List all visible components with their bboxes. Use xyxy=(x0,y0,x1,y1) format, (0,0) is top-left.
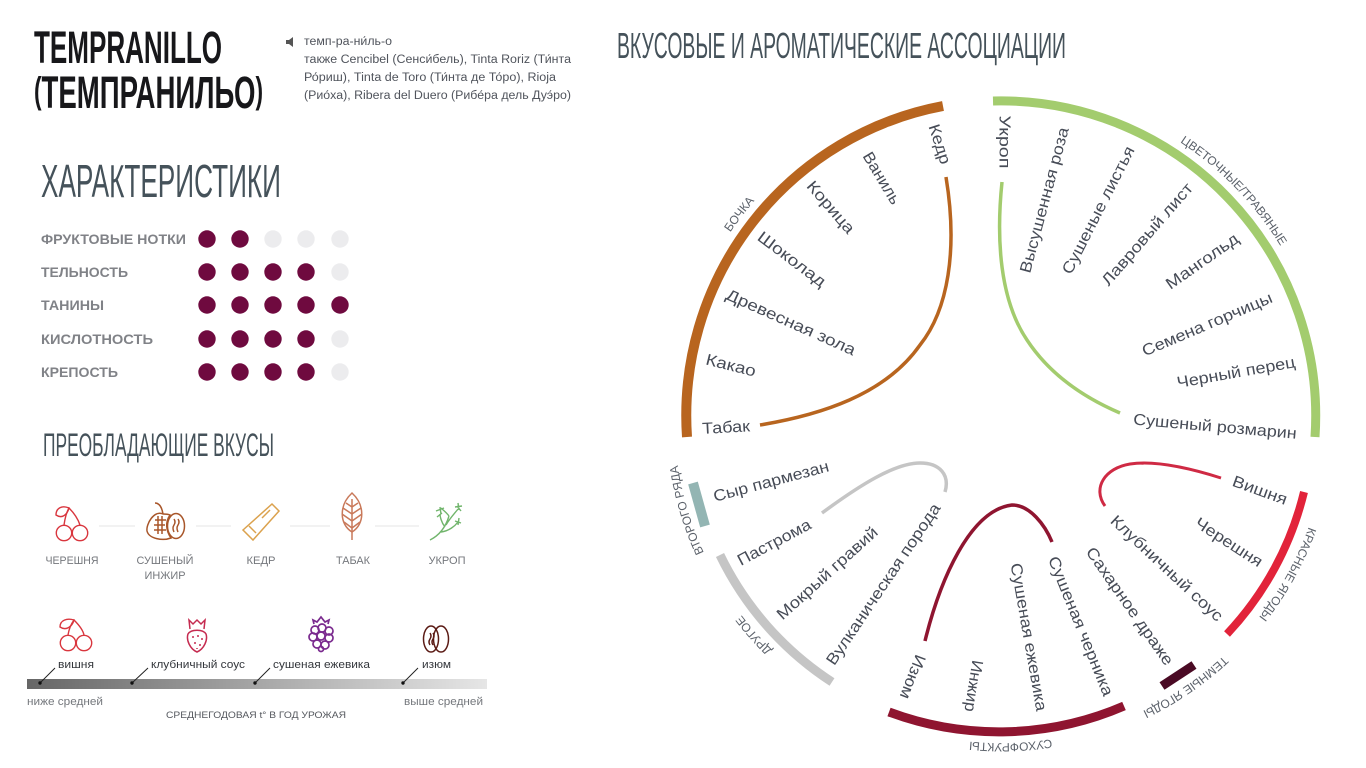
text block: pronunciation and synonyms: темп-ра-ни́ль-о xyxy=(304,36,392,48)
wheel segment: floral and herbal: Лавровый лист xyxy=(1099,180,1197,289)
title: ) xyxy=(255,70,263,111)
scale caption: СРЕДНЕГОДОВАЯ t° В ГОД УРОЖАЯ xyxy=(166,710,346,721)
wheel segment: barrel: Шоколад xyxy=(754,229,829,292)
wheel segment: barrel: Корица xyxy=(803,178,858,238)
wheel segment: red berries: Вишня xyxy=(1230,473,1289,509)
marker: dried blackberry: сушеная ежевика xyxy=(273,659,371,671)
wheel segment: other: Вулканическая порода xyxy=(823,501,944,669)
temperature gradient bar xyxy=(27,679,487,689)
row: body xyxy=(41,263,349,281)
text block: pronunciation and synonyms: также Cencibel (Сенси́бель), Tinta Roriz (Ти́нта xyxy=(304,54,572,66)
wheel segment: other: ДРУГОЕ xyxy=(736,616,774,654)
icon: blackberry xyxy=(309,617,333,652)
label: dill: УКРОП xyxy=(428,555,466,567)
panel: vintage temperature scale xyxy=(27,617,487,721)
marker: strawberry sauce xyxy=(130,659,246,685)
wheel segment: red berries xyxy=(1098,462,1316,637)
wheel segment: barrel: Кедр xyxy=(925,122,953,167)
icon: speaker xyxy=(286,37,293,47)
row: body: ТЕЛЬНОСТЬ xyxy=(41,264,128,280)
label: dried fig xyxy=(136,554,194,582)
row: fruit notes xyxy=(41,230,349,248)
title: ( xyxy=(34,70,42,111)
icon: dill xyxy=(430,503,462,540)
wheel segment: dried fruit: Сушеная черника xyxy=(1044,554,1116,699)
wheel segment: barrel: Табак xyxy=(702,418,752,438)
row: tannins: ТАНИНЫ xyxy=(41,297,104,313)
wheel segment: dark berries xyxy=(1082,544,1229,718)
wheel segment: floral and herbal xyxy=(992,96,1320,443)
wheel segment: dried fruit: СУХОФРУКТЫ xyxy=(970,740,1052,752)
label: cedar: КЕДР xyxy=(246,555,276,567)
wheel segment: floral and herbal: ЦВЕТОЧНЫЕ/ТРАВЯНЫЕ xyxy=(1180,136,1287,246)
wheel segment: secondary: ВТОРОГО РЯДА xyxy=(670,465,704,555)
wheel segment: floral and herbal: Высушенная роза xyxy=(1017,126,1073,275)
row: fruit notes: ФРУКТОВЫЕ НОТКИ xyxy=(41,231,186,247)
wheel segment: other xyxy=(716,461,948,686)
title: TEMPRANILLO xyxy=(34,22,222,73)
wheel segment: floral and herbal: Сушеные листья xyxy=(1059,144,1139,277)
title xyxy=(34,22,263,118)
wheel segment: dried fruit: Инжир xyxy=(960,659,985,713)
icon: dried fig xyxy=(147,503,184,539)
row: tannins xyxy=(41,296,349,314)
wheel segment: red berries: Клубничный соус xyxy=(1107,512,1226,625)
wheel segment: barrel: Ваниль xyxy=(859,149,903,208)
heading: dominant flavours: ПРЕОБЛАДАЮЩИЕ ВКУСЫ xyxy=(43,427,274,463)
marker: cherry xyxy=(38,659,94,685)
wheel segment: barrel: БОЧКА xyxy=(724,198,754,232)
wheel segment: floral and herbal: Мангольд xyxy=(1163,230,1243,293)
heading: characteristics: ХАРАКТЕРИСТИКИ xyxy=(41,155,281,207)
wheel segment: dried fruit: Изюм xyxy=(896,652,928,701)
icon: strawberry xyxy=(187,620,207,652)
wheel segment: red berries: КРАСНЫЕ ЯГОДЫ xyxy=(1260,528,1316,622)
label: tobacco: ТАБАК xyxy=(336,555,371,567)
wheel segment: floral and herbal: Черный перец xyxy=(1176,354,1297,392)
panel: dominant flavours row xyxy=(46,493,466,582)
wheel segment: floral and herbal: Семена горчицы xyxy=(1140,290,1275,360)
wheel segment: dried fruit: Сушеная ежевика xyxy=(1007,562,1049,713)
text block: pronunciation and synonyms: Ро́риш), Tinta de Toro (Ти́нта де То́ро), Rioja xyxy=(304,72,557,84)
label: dried fig: СУШЕНЫЙ xyxy=(136,554,194,567)
row: acidity: КИСЛОТНОСТЬ xyxy=(41,331,153,347)
wheel segment: floral and herbal: Укроп xyxy=(995,116,1012,168)
text block: pronunciation and synonyms xyxy=(304,36,572,102)
marker: dried blackberry xyxy=(253,659,371,685)
wheel segment: red berries: Черешня xyxy=(1191,515,1265,571)
marker: strawberry sauce: клубничный соус xyxy=(151,659,246,671)
label: cherry: ЧЕРЕШНЯ xyxy=(46,555,99,567)
wheel segment: floral and herbal: Сушеный розмарин xyxy=(1132,411,1297,443)
wheel segment: secondary: Сыр пармезан xyxy=(712,458,831,506)
marker: raisin: изюм xyxy=(422,659,451,671)
icon: cherry xyxy=(56,507,88,541)
icon: cherry small xyxy=(60,619,92,651)
wheel segment: other: Мокрый гравий xyxy=(774,524,882,624)
wheel segment: secondary xyxy=(670,458,831,555)
wheel segment: barrel: Древесная зола xyxy=(723,287,858,359)
wheel segment: dark berries: Сахарное драже xyxy=(1082,544,1176,669)
icon: cedar plank xyxy=(243,504,279,540)
row: alcohol xyxy=(41,363,349,381)
row: acidity xyxy=(41,330,349,348)
icon: tobacco leaf xyxy=(342,493,362,540)
text block: pronunciation and synonyms: (Рио́ха), Ribera del Duero (Рибе́ра дель Дуэ́ро) xyxy=(304,90,571,102)
icon: raisin xyxy=(424,626,448,652)
wheel segment: barrel: Какао xyxy=(704,352,758,381)
row: alcohol: КРЕПОСТЬ xyxy=(41,364,118,380)
title: ТЕМПРАНИЛЬО xyxy=(42,67,255,118)
scale label: above average: выше средней xyxy=(404,696,483,708)
wheel segment: barrel xyxy=(681,101,953,438)
panel: characteristics ratings xyxy=(41,230,349,381)
wheel segment: dark berries: ТЕМНЫЕ ЯГОДЫ xyxy=(1144,658,1229,718)
label: dried fig: ИНЖИР xyxy=(144,570,186,582)
wheel segment: other: Пастрома xyxy=(735,516,814,569)
marker: raisin xyxy=(401,659,451,685)
wheel segment: dried fruit xyxy=(888,503,1126,752)
scale label: below average: ниже средней xyxy=(27,696,103,708)
marker: cherry: вишня xyxy=(58,659,94,671)
